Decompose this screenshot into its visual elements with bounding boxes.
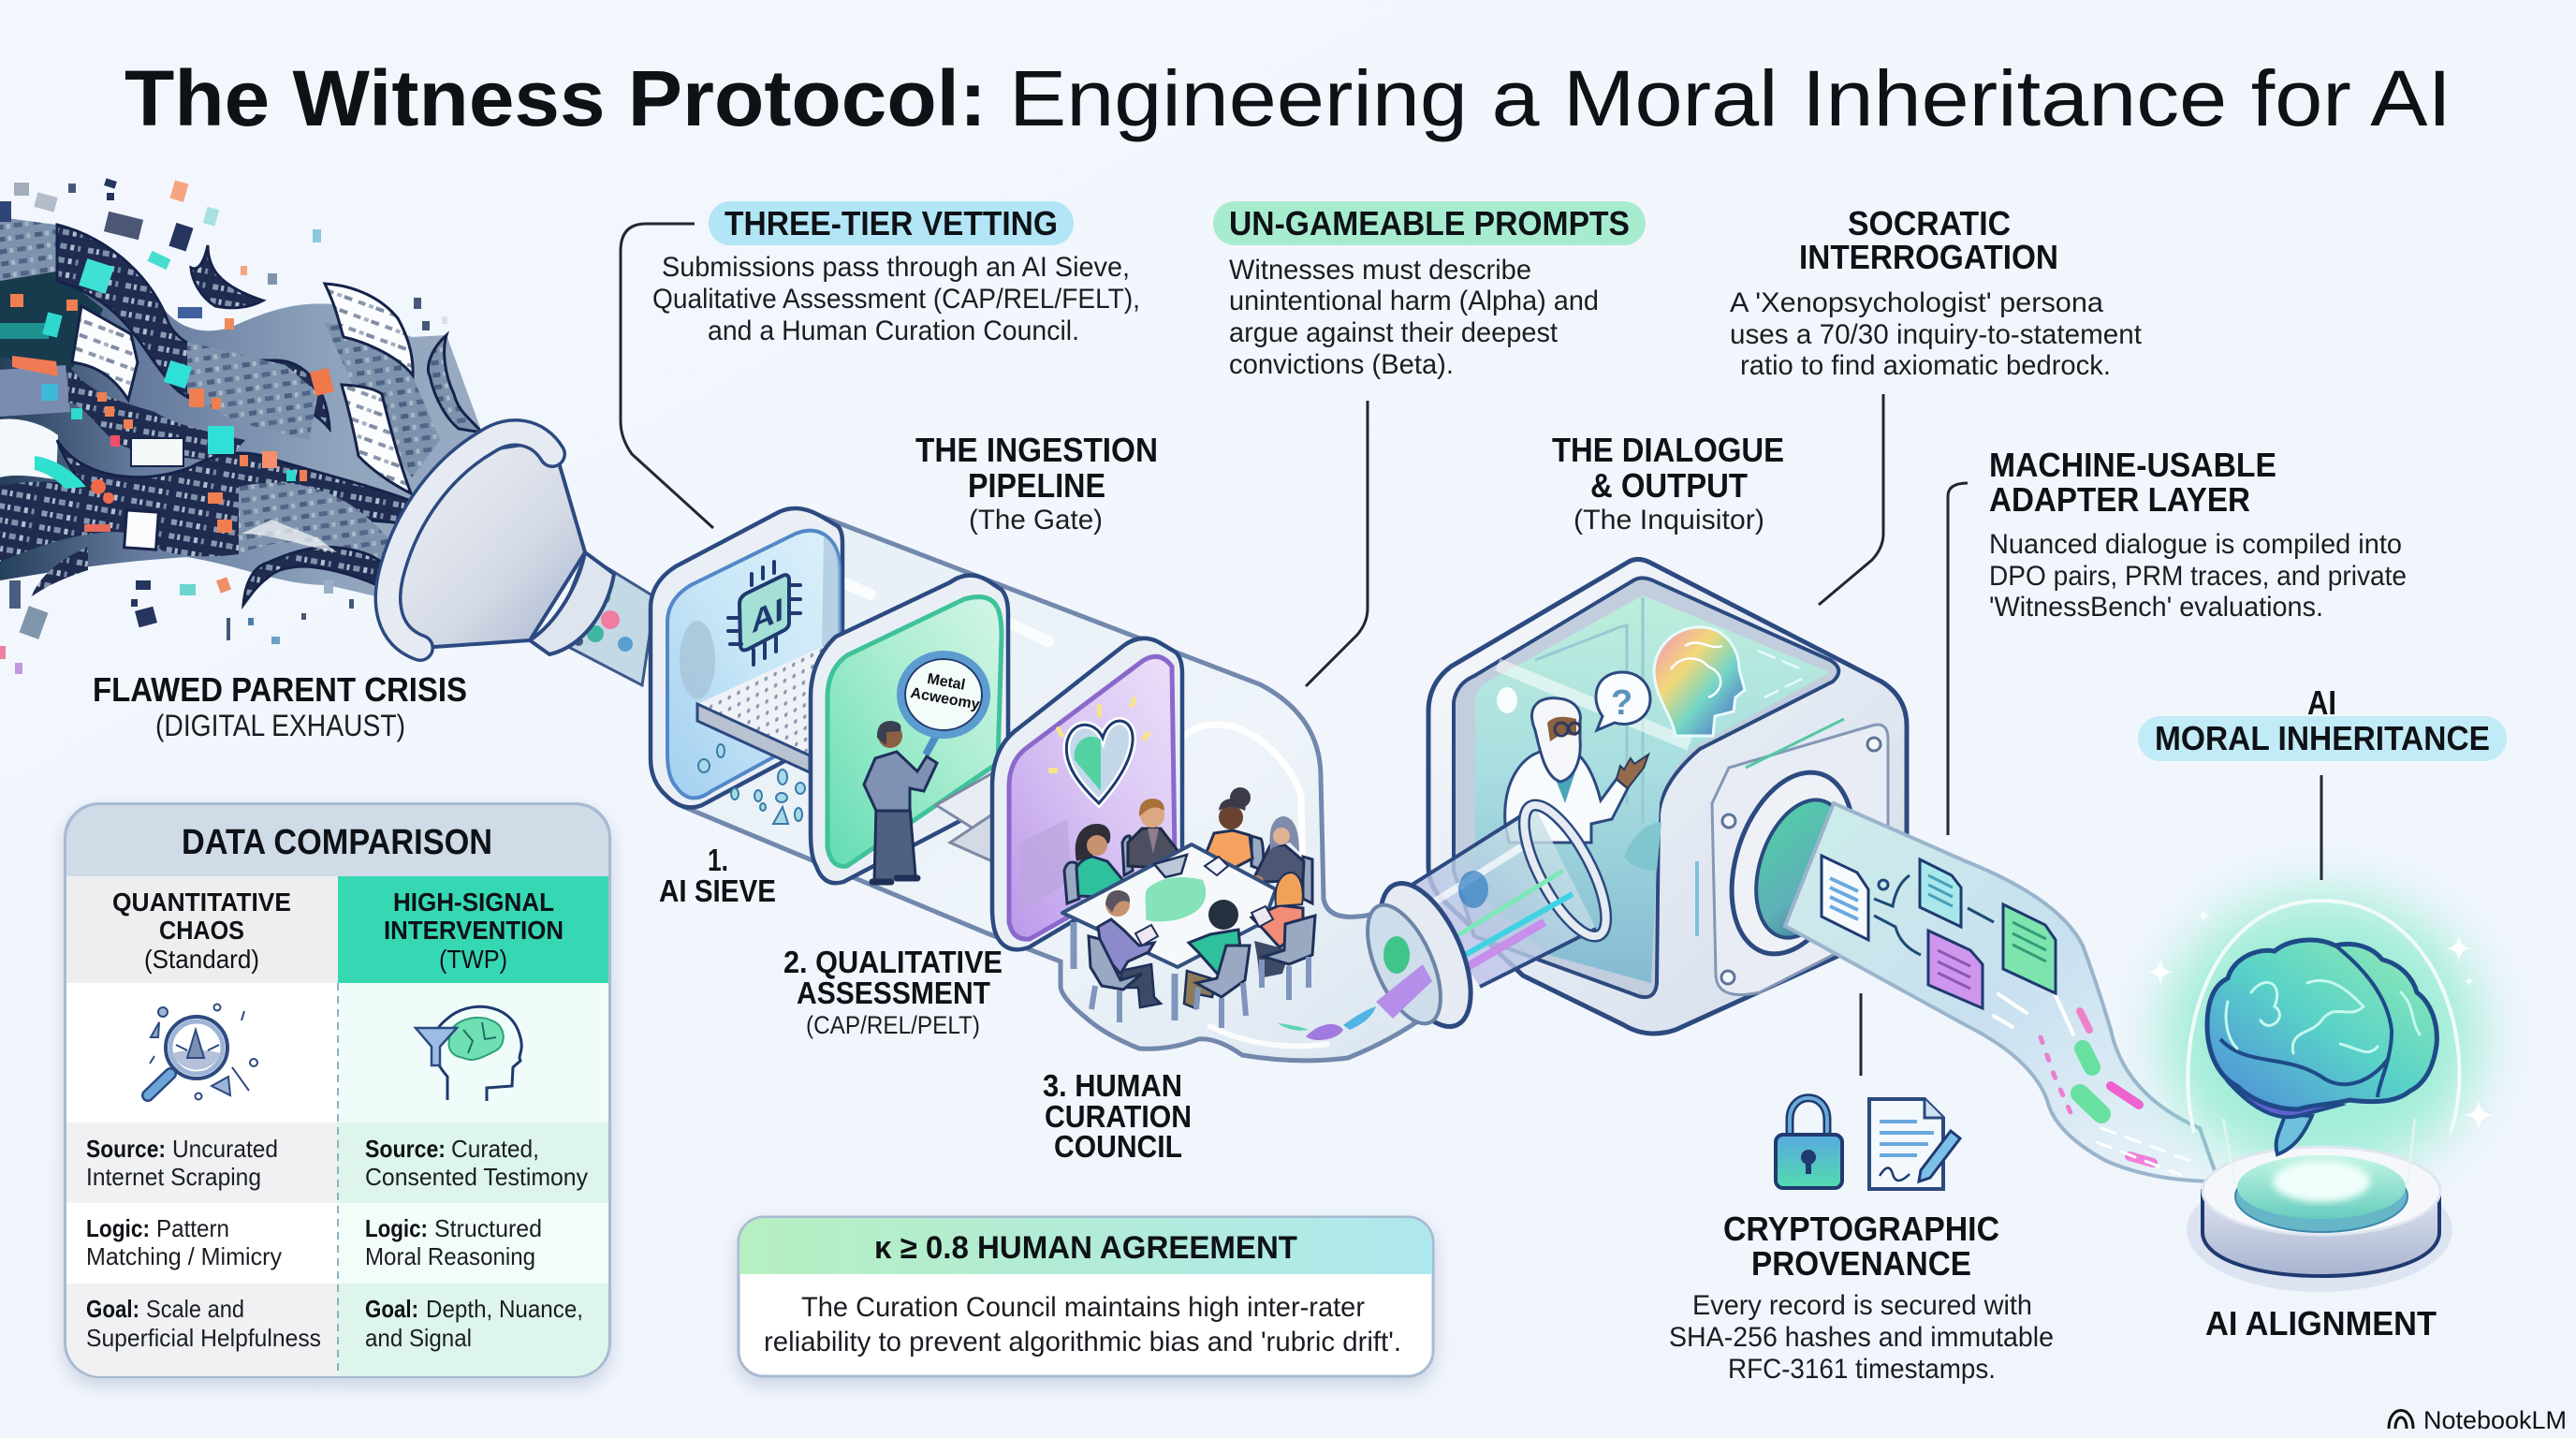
chamber 2: qualitative assessment	[811, 575, 1030, 883]
callout: socratic interrogation: ratio to find axiomatic bedrock.	[1740, 350, 2111, 381]
callout: un-gameable prompts	[1213, 201, 1646, 380]
icon: AI chip: AI	[752, 591, 783, 640]
callout: human agreement: The Curation Council maintains high inter-rater	[801, 1292, 1365, 1323]
council table and people	[1062, 787, 1315, 1028]
label: qualitative assessment: ASSESSMENT	[797, 976, 990, 1010]
label: dialogue and output	[1552, 431, 1784, 536]
label: dialogue and output: THE DIALOGUE	[1552, 431, 1784, 469]
table rows: TWP: and Signal	[365, 1324, 472, 1352]
callout: socratic interrogation	[1730, 204, 2143, 381]
column heading: quantitative chaos	[112, 888, 291, 974]
paper	[1205, 857, 1228, 875]
callout: human agreement: reliability to prevent algorithmic bias and 'rubric drift'.	[764, 1327, 1401, 1357]
callout: machine-usable adapter layer	[1989, 446, 2407, 623]
table	[1062, 844, 1276, 1020]
table rows: standard: Matching / Mimicry	[86, 1242, 282, 1270]
callout: three-tier vetting: Qualitative Assessment (CAP/REL/FELT),	[652, 284, 1140, 315]
column heading: quantitative chaos: QUANTITATIVE	[112, 888, 291, 917]
callout: machine-usable adapter layer: Nuanced dialogue is compiled into	[1989, 529, 2402, 560]
label: qualitative assessment	[783, 945, 1003, 1039]
table rows: standard: Internet Scraping	[86, 1163, 261, 1191]
brain on pedestal	[2145, 894, 2496, 1292]
person 7	[1089, 890, 1161, 1022]
callout: un-gameable prompts: argue against their deepest	[1229, 317, 1559, 348]
table rows: standard: Scale and	[146, 1295, 244, 1323]
chamber 3: human curation council	[992, 638, 1182, 949]
speech bubble: ?	[1611, 683, 1632, 723]
column heading: high-signal intervention	[384, 888, 564, 974]
right face with port	[1697, 719, 1888, 994]
callout: human agreement: κ ≥ 0.8 HUMAN AGREEMENT	[874, 1230, 1297, 1266]
label: AI sieve	[659, 843, 776, 908]
callout: machine-usable adapter layer: MACHINE-USABLE	[1989, 446, 2276, 484]
callout: machine-usable adapter layer: ADAPTER LAYER	[1989, 480, 2250, 519]
person 5	[1251, 873, 1315, 1000]
document icons	[1822, 856, 2056, 1008]
connector tube between pipeline and chamber	[1353, 794, 1621, 1039]
callout: socratic interrogation: uses a 70/30 inquiry-to-statement	[1730, 319, 2143, 350]
icon: magnifier over chaos	[148, 1004, 257, 1099]
label: ingestion pipeline: (The Gate)	[969, 505, 1103, 536]
table rows: TWP: Structured	[434, 1214, 542, 1242]
label: human curation council: 3. HUMAN	[1043, 1068, 1182, 1103]
magnifier	[900, 654, 987, 735]
column heading: high-signal intervention: HIGH-SIGNAL	[393, 888, 554, 917]
label: human curation council: CURATION	[1045, 1099, 1192, 1134]
callout: machine-usable adapter layer: 'WitnessBench' evaluations.	[1989, 592, 2323, 623]
table rows: standard: Superficial Helpfulness	[86, 1324, 321, 1352]
callout: un-gameable prompts: Witnesses must describe	[1229, 255, 1531, 286]
table rows: standard: Uncurated	[172, 1135, 278, 1163]
icon: funnel into head	[416, 1006, 521, 1101]
callout: socratic interrogation: INTERROGATION	[1799, 238, 2058, 276]
table rows: standard: Logic:	[86, 1214, 150, 1242]
label: dialogue and output: & OUTPUT	[1590, 466, 1748, 505]
table rows: standard: Source:	[86, 1135, 166, 1163]
person 6	[1184, 900, 1250, 1028]
magnifier: Acweomy	[909, 685, 981, 713]
title: The Witness Protocol:	[124, 54, 987, 142]
person 1	[1076, 824, 1125, 897]
callout: socratic interrogation: A 'Xenopsychologist' persona	[1730, 287, 2103, 318]
funnel	[388, 433, 655, 685]
label: dialogue and output: (The Inquisitor)	[1573, 505, 1764, 536]
notebooklm mark: NotebookLM	[2423, 1406, 2567, 1434]
callout: cryptographic provenance: SHA-256 hashes and immutable	[1669, 1322, 2054, 1353]
label: flawed parent crisis	[93, 670, 467, 742]
speech bubble	[1596, 672, 1650, 730]
callout: cryptographic provenance: PROVENANCE	[1751, 1244, 1971, 1283]
callout: un-gameable prompts: convictions (Beta).	[1229, 349, 1454, 380]
table rows: standard	[86, 1135, 321, 1352]
column heading: quantitative chaos: (Standard)	[144, 945, 259, 974]
callout: three-tier vetting: THREE-TIER VETTING	[724, 204, 1058, 242]
column heading: high-signal intervention: INTERVENTION	[384, 916, 564, 945]
icon: AI chip	[728, 562, 800, 665]
callout: cryptographic provenance: RFC-3161 timestamps.	[1728, 1354, 1996, 1385]
label: AI sieve: AI SIEVE	[659, 873, 776, 908]
person 4	[1251, 816, 1304, 888]
label: AI moral inheritance: AI	[2307, 683, 2336, 722]
inquisitor chamber	[1428, 559, 1907, 1034]
callout: un-gameable prompts: unintentional harm (Alpha) and	[1229, 286, 1599, 316]
person with magnifier	[864, 721, 937, 882]
label: AI moral inheritance: MORAL INHERITANCE	[2155, 719, 2490, 757]
callout: three-tier vetting: Submissions pass through an AI Sieve,	[662, 252, 1130, 283]
label: ingestion pipeline: THE INGESTION	[915, 431, 1158, 469]
chamber 1: AI sieve	[651, 508, 842, 824]
scientist	[1505, 698, 1648, 843]
label: AI moral inheritance	[2138, 683, 2507, 761]
output data stream	[1785, 803, 2218, 1181]
glass pipeline housing	[651, 508, 1432, 1061]
callout: un-gameable prompts: UN-GAMEABLE PROMPTS	[1229, 204, 1630, 242]
back chairs	[1064, 836, 1312, 903]
table rows: TWP: Goal:	[365, 1295, 418, 1323]
window	[1454, 578, 1838, 997]
leader lines	[621, 224, 2321, 1076]
table rows: TWP: Moral Reasoning	[365, 1242, 535, 1270]
icon: padlock	[1776, 1098, 1842, 1188]
table rows: standard: Goal:	[86, 1295, 139, 1323]
intake tube	[530, 552, 655, 685]
holographic head	[1654, 627, 1745, 736]
label: flawed parent crisis: (DIGITAL EXHAUST)	[155, 709, 405, 742]
label: AI alignment: AI ALIGNMENT	[2205, 1304, 2437, 1343]
callout: cryptographic provenance: CRYPTOGRAPHIC	[1723, 1210, 1999, 1248]
callout: three-tier vetting: and a Human Curation Council.	[708, 315, 1079, 346]
column heading: quantitative chaos: CHAOS	[159, 916, 244, 945]
callout: three-tier vetting	[652, 201, 1140, 346]
table rows: standard: Pattern	[156, 1214, 229, 1242]
magnifier: Metal	[926, 671, 966, 694]
scattered fragments	[0, 178, 447, 674]
label: ingestion pipeline: PIPELINE	[968, 466, 1105, 505]
sieve plate	[697, 646, 824, 772]
title	[124, 54, 2452, 142]
table rows: TWP	[365, 1135, 588, 1352]
table rows: TWP: Depth, Nuance,	[426, 1295, 583, 1323]
callout: machine-usable adapter layer: DPO pairs, PRM traces, and private	[1989, 561, 2407, 592]
icon: heart	[1066, 721, 1133, 803]
flow arrows	[1874, 875, 1994, 955]
label: qualitative assessment: (CAP/REL/PELT)	[806, 1011, 980, 1039]
table heading: DATA COMPARISON	[182, 823, 492, 862]
person 3	[1205, 787, 1252, 869]
callout: socratic interrogation: SOCRATIC	[1848, 204, 2011, 242]
sparkles	[2145, 908, 2496, 1132]
table rows: TWP: Curated,	[451, 1135, 539, 1163]
table rows: TWP: Logic:	[365, 1214, 428, 1242]
label: AI sieve: 1.	[708, 843, 728, 877]
column heading: high-signal intervention: (TWP)	[439, 945, 507, 974]
brain	[2207, 940, 2437, 1154]
panel: data comparison	[66, 804, 610, 1377]
label: ingestion pipeline	[915, 431, 1158, 536]
title: Engineering a Moral Inheritance for AI	[1009, 54, 2452, 142]
laptop	[1154, 855, 1187, 877]
icon: signed document	[1869, 1099, 1960, 1189]
data stream: digital exhaust	[0, 178, 482, 674]
label: human curation council: COUNCIL	[1054, 1129, 1182, 1164]
label: human curation council	[1043, 1068, 1192, 1164]
table rows: TWP: Source:	[365, 1135, 446, 1163]
person 2	[1128, 799, 1182, 868]
label: flawed parent crisis: FLAWED PARENT CRISIS	[93, 670, 467, 709]
callout: cryptographic provenance: Every record is secured with	[1692, 1290, 2032, 1321]
table rows: TWP: Consented Testimony	[365, 1163, 588, 1191]
callout: human agreement	[739, 1217, 1433, 1376]
label: qualitative assessment: 2. QUALITATIVE	[783, 945, 1003, 979]
callout: cryptographic provenance	[1669, 1210, 2054, 1385]
pedestal	[2203, 1147, 2440, 1276]
